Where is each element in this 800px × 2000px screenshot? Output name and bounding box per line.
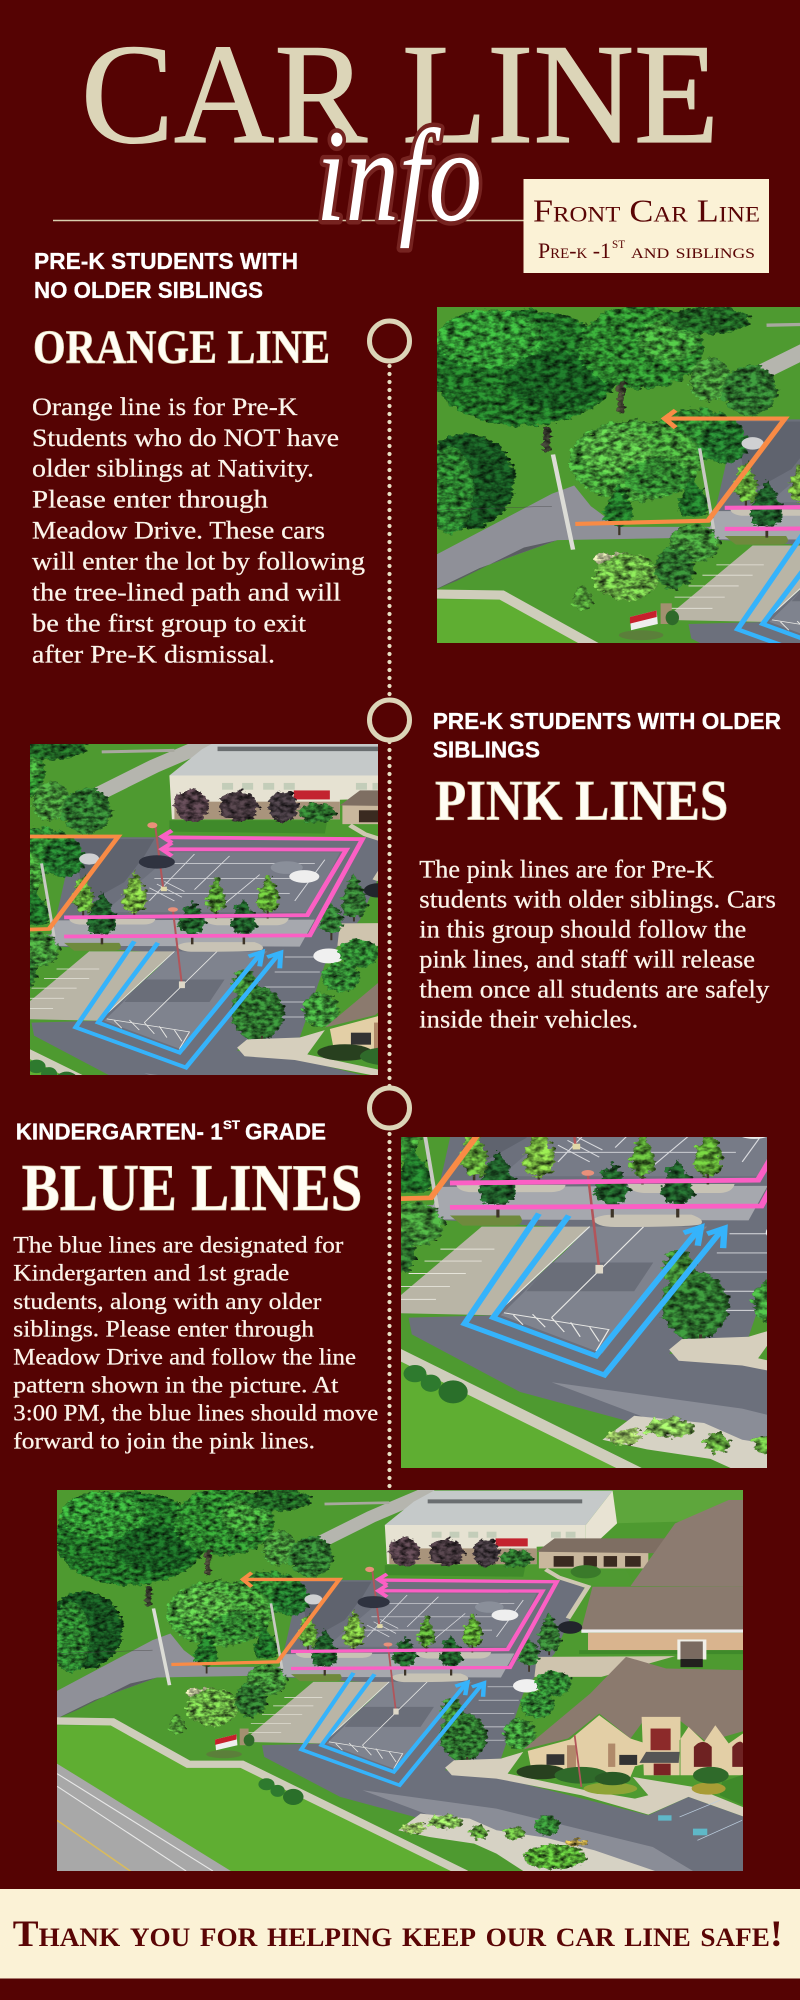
text: orange line description: Please enter through [32, 487, 269, 514]
text: pink lines description: in this group should follow the [419, 916, 746, 943]
text: blue lines description: Meadow Drive and follow the line [13, 1345, 356, 1370]
timeline: dotted connector [387, 366, 392, 1490]
text: orange line description: be the first group to exit [32, 611, 306, 638]
text: blue lines description: siblings. Please enter through [13, 1317, 315, 1342]
badge: front car line: Front Car Line [533, 192, 760, 228]
section label: orange line audience: NO OLDER SIBLINGS [34, 277, 263, 303]
text: orange line description: Orange line is for Pre-K [32, 394, 298, 421]
heading: pink lines: PINK LINES [435, 769, 728, 832]
section label: blue lines audience: ST [223, 1118, 241, 1132]
section label: blue lines audience: KINDERGARTEN- 1 [16, 1118, 223, 1144]
photo: full aerial view [57, 1490, 743, 1871]
heading: orange line: ORANGE LINE [33, 321, 330, 374]
timeline ring 3 [370, 1088, 410, 1128]
text: blue lines description [13, 1233, 378, 1454]
text: pink lines description [419, 856, 776, 1033]
badge: front car line: and siblings [631, 238, 755, 263]
text: blue lines description: 3:00 PM, the blue lines should move [13, 1401, 378, 1426]
text: orange line description: after Pre-K dismissal. [32, 642, 275, 669]
text: pink lines description: them once all students are safely [419, 976, 770, 1003]
text: orange line description: older siblings at Nativity. [32, 456, 314, 483]
section label: orange line audience [34, 248, 298, 303]
text: blue lines description: The blue lines are designated for [13, 1233, 344, 1258]
header rule [53, 220, 524, 222]
text: orange line description: Meadow Drive. These cars [32, 517, 325, 544]
text: blue lines description: students, along with any older [13, 1289, 322, 1314]
section label: blue lines audience [16, 1118, 326, 1144]
photo: orange line crop [437, 307, 800, 643]
footer banner [0, 1889, 800, 1978]
section label: pink lines audience [433, 708, 781, 763]
title: car line: CAR LINE [81, 15, 719, 173]
photo: pink lines crop [30, 744, 378, 1075]
photo: blue lines crop [401, 1137, 767, 1468]
text: pink lines description: students with older siblings. Cars [419, 886, 776, 913]
text: blue lines description: pattern shown in the picture. At [13, 1373, 339, 1398]
timeline ring 1 [370, 321, 410, 361]
text: orange line description: Students who do NOT have [32, 425, 339, 452]
text: orange line description [32, 394, 366, 669]
title: info script: info [316, 102, 482, 249]
section label: pink lines audience: SIBLINGS [433, 737, 540, 763]
text: pink lines description: The pink lines are for Pre-K [419, 856, 714, 883]
section label: pink lines audience: PRE-K STUDENTS WITH OLDER [433, 708, 781, 734]
text: blue lines description: forward to join the pink lines. [13, 1429, 315, 1454]
text: pink lines description: pink lines, and staff will release [419, 946, 755, 973]
text: blue lines description: Kindergarten and 1st grade [13, 1261, 289, 1286]
text: orange line description: the tree-lined path and will [32, 580, 341, 607]
section label: blue lines audience: GRADE [245, 1118, 326, 1144]
badge: front car line: Pre-k -1 [538, 238, 611, 263]
badge: front car line [524, 179, 769, 273]
footer banner: Thank you for helping keep our car line safe! [13, 1914, 783, 1955]
section label: orange line audience: PRE-K STUDENTS WITH [34, 248, 298, 274]
text: pink lines description: inside their vehicles. [419, 1006, 638, 1033]
badge: front car line: ST [612, 237, 626, 251]
text: orange line description: will enter the lot by following [32, 548, 366, 575]
heading: blue lines: BLUE LINES [22, 1151, 362, 1225]
timeline ring 2 [370, 700, 410, 740]
